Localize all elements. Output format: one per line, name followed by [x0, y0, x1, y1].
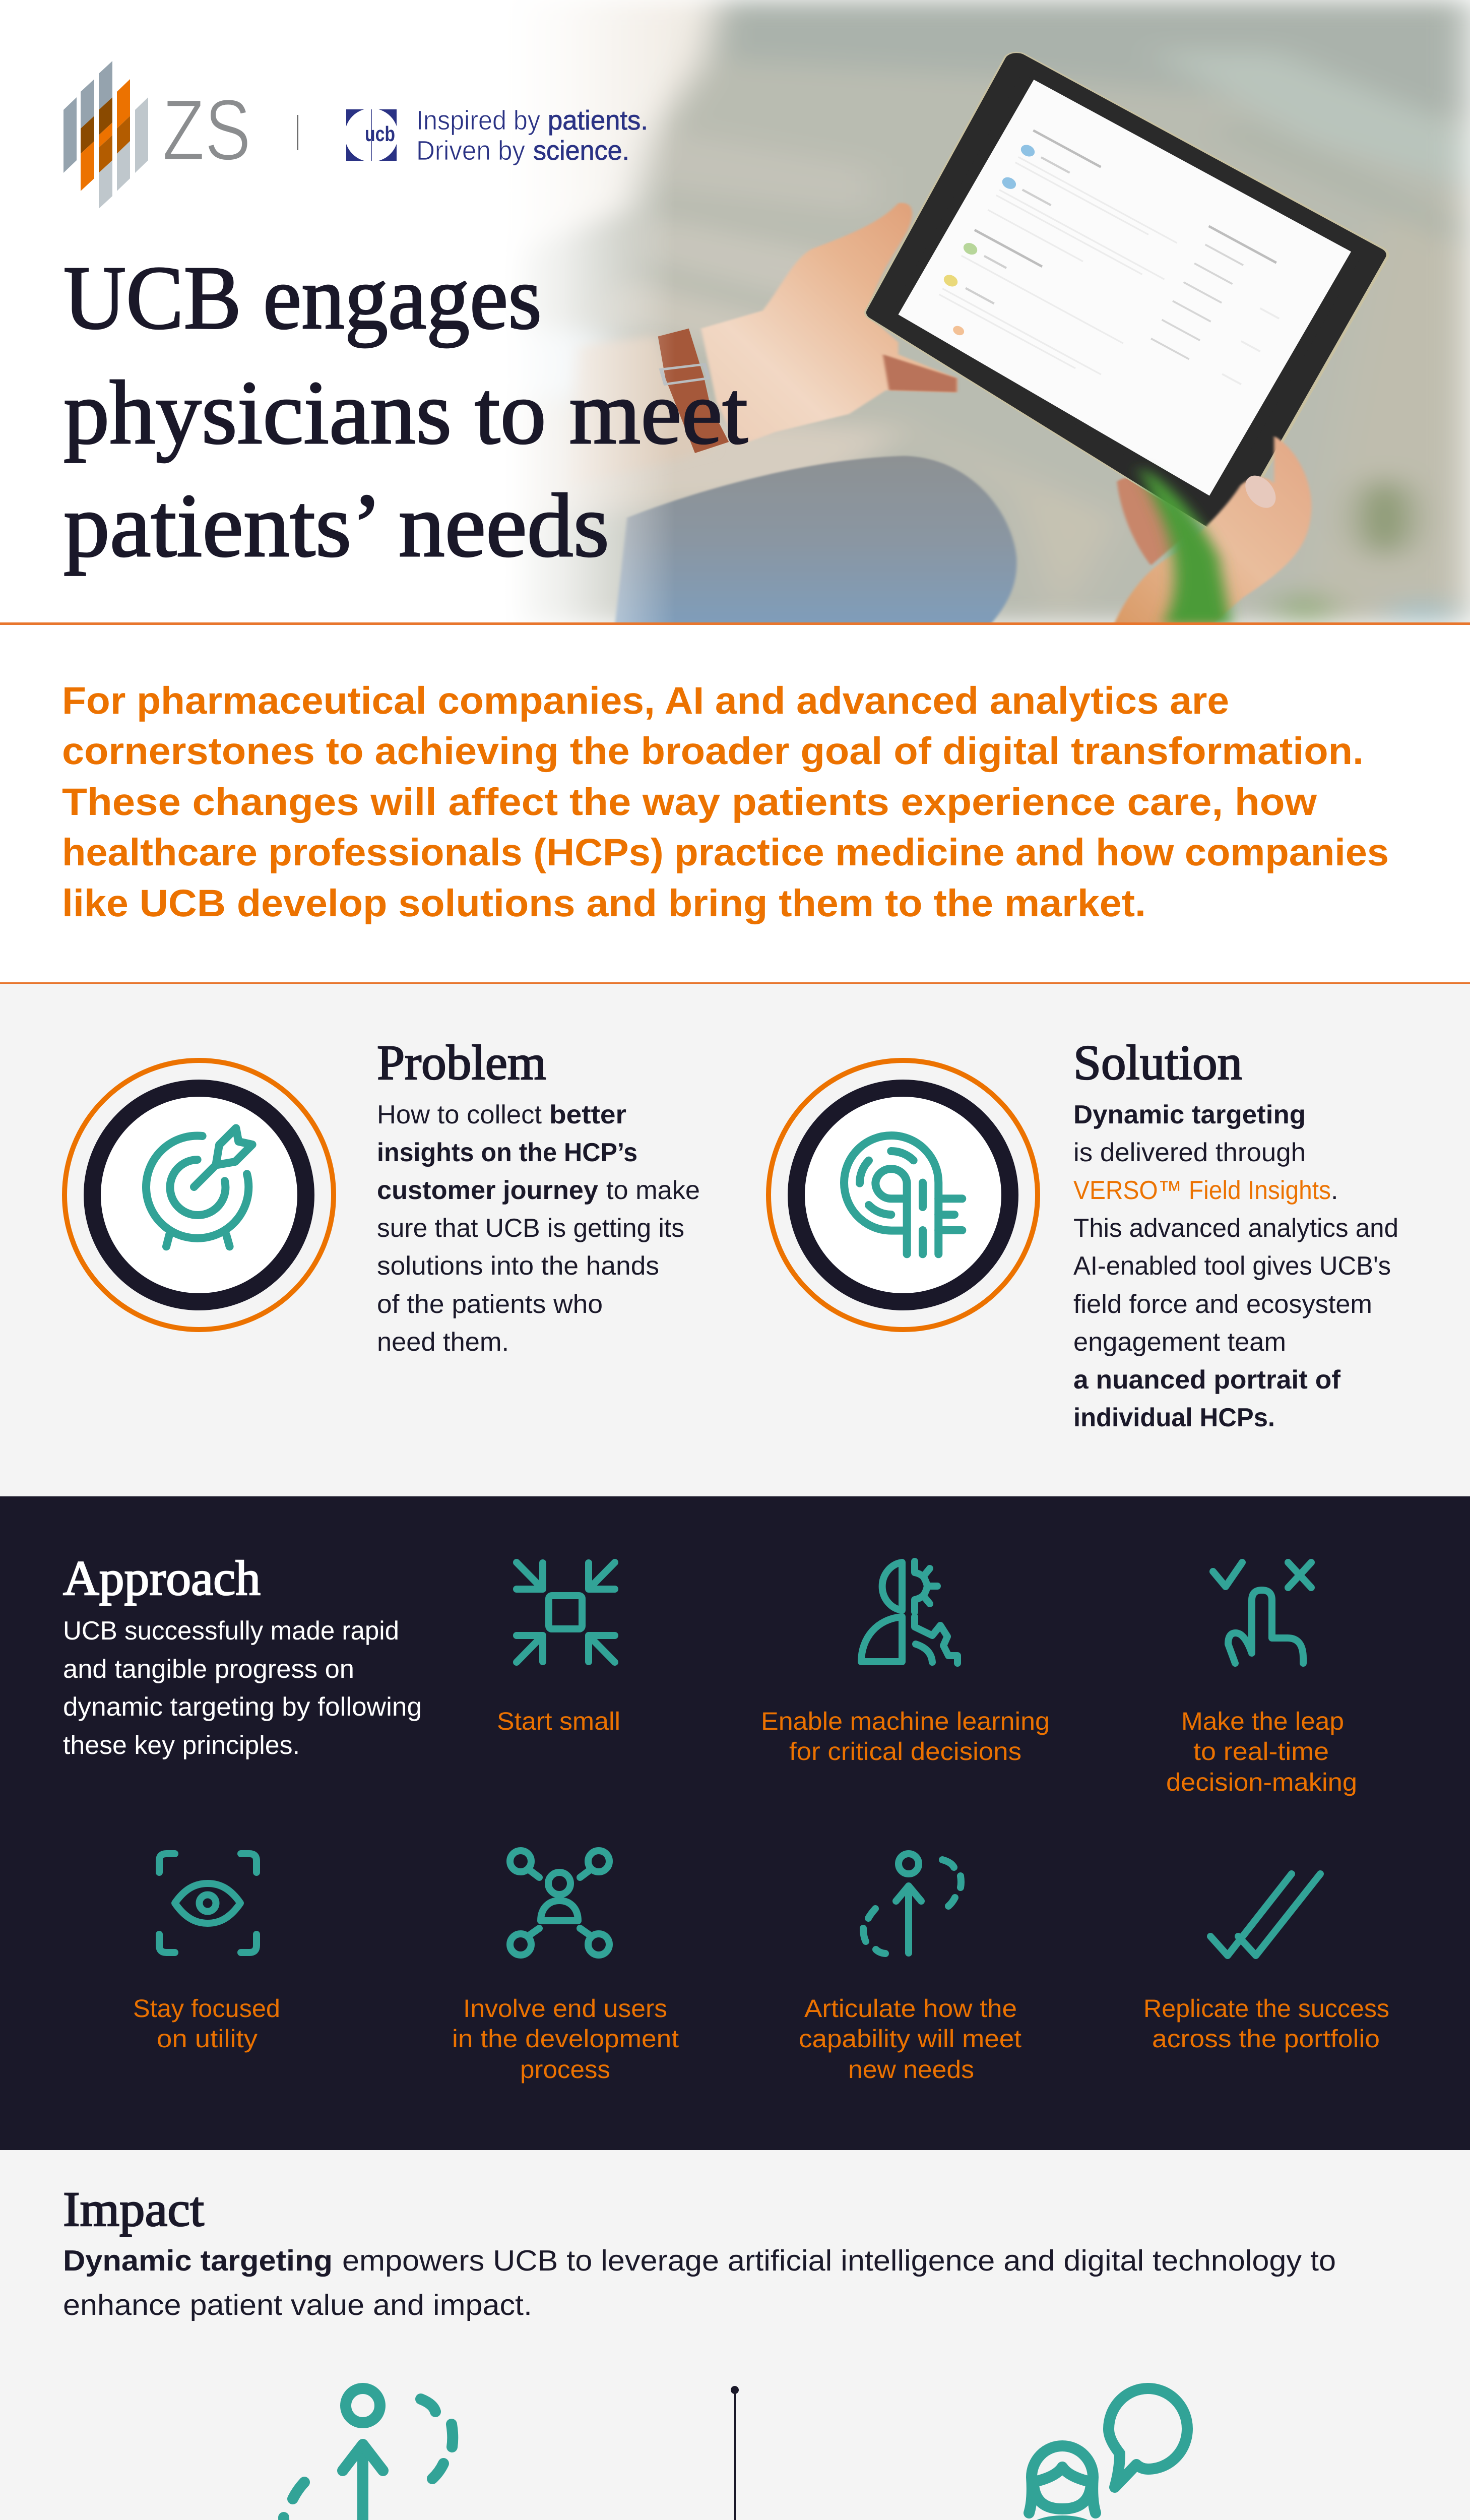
logo: UCB	[345, 105, 648, 166]
icon: capability arrow	[863, 1854, 961, 1954]
icon: utility eye	[159, 1854, 257, 1952]
hero fade to white	[504, 0, 675, 622]
solution text: a nuanced portrait of	[1073, 1365, 1341, 1395]
label: end users: process	[520, 2055, 610, 2084]
label: capability: capability will meet	[799, 2025, 1021, 2053]
problem text: solutions into the hands	[377, 1251, 659, 1281]
forearm	[577, 335, 684, 427]
icon: double check	[1210, 1874, 1320, 1956]
title	[63, 247, 748, 576]
icon: field employee speaking	[1017, 2388, 1187, 2520]
icon: end users network	[510, 1851, 609, 1955]
intro text: like UCB develop solutions and bring them to the market.	[62, 882, 1146, 925]
panel: hero	[0, 0, 1470, 625]
panel: problem	[65, 1036, 700, 1357]
label: capability: new needs	[848, 2055, 974, 2084]
problem text: How to collect	[377, 1100, 542, 1129]
heading: problem: Problem	[377, 1036, 546, 1090]
label: end users: Involve end users	[463, 1994, 667, 2023]
logo: UCB: Inspired by	[416, 105, 540, 136]
jeans knee	[615, 456, 1017, 624]
problem text: insights on the HCP’s	[377, 1138, 637, 1167]
label: machine learning: for critical decisions	[789, 1737, 1021, 1766]
logo: UCB: Driven by	[416, 136, 525, 166]
approach text: UCB successfully made rapid	[63, 1616, 399, 1646]
heading: solution: Solution	[1073, 1036, 1242, 1090]
hero photo: hands holding a tablet	[0, 0, 1470, 625]
label: utility: on utility	[157, 2025, 258, 2053]
problem text: sure that UCB is getting its	[377, 1214, 684, 1243]
icon: machine learning	[861, 1561, 957, 1663]
problem text: need them.	[377, 1328, 509, 1357]
left hand	[701, 203, 957, 446]
problem text: to make	[606, 1176, 700, 1205]
heading: approach: Approach	[63, 1551, 261, 1606]
label: end users: in the development	[452, 2025, 679, 2053]
label: capability	[799, 1994, 1021, 2084]
intro text: cornerstones to achieving the broader goal of digital transformation.	[62, 730, 1364, 773]
title: UCB engages	[63, 247, 542, 348]
lower hand fingers behind tablet	[1116, 477, 1178, 565]
heading: impact: Impact	[63, 2182, 204, 2237]
icon: numbers arrow	[284, 2388, 453, 2520]
solution text: field force and ecosystem	[1073, 1290, 1372, 1319]
foreground leaf	[1138, 466, 1231, 624]
icon: fingerprint AI	[769, 1060, 1038, 1330]
intro text: These changes will affect the way patients experience care, how	[62, 781, 1317, 824]
approach text: these key principles.	[63, 1731, 300, 1760]
intro text: For pharmaceutical companies, AI and advanced analytics are	[62, 679, 1229, 722]
label: machine learning	[761, 1707, 1050, 1766]
panel: intro	[0, 625, 1470, 983]
impact intro	[63, 2244, 1336, 2321]
icon: real-time decision	[1213, 1562, 1311, 1663]
approach text	[63, 1616, 422, 1760]
logo: ZS: ZS	[162, 82, 251, 178]
title: physicians to meet	[63, 362, 748, 463]
label: machine learning: Enable machine learning	[761, 1707, 1050, 1735]
intro text	[62, 679, 1389, 925]
tablet body	[878, 60, 1375, 525]
divider: vertical line	[731, 2386, 739, 2520]
panel: impact	[63, 2182, 1336, 2520]
solution text	[1073, 1100, 1398, 1432]
icon: start small	[517, 1562, 615, 1662]
label: replicate	[1143, 1994, 1389, 2053]
solution text: is delivered through	[1073, 1138, 1306, 1167]
label: utility: Stay focused	[133, 1994, 280, 2023]
label: start small: Start small	[497, 1707, 620, 1735]
logo: UCB: science.	[533, 136, 629, 166]
title: patients’ needs	[63, 475, 609, 576]
label: replicate: Replicate the success	[1143, 1994, 1389, 2023]
panel: approach	[0, 1496, 1470, 2150]
label: real-time decision: Make the leap	[1181, 1707, 1344, 1735]
tablet screen	[898, 80, 1351, 496]
solution text: AI-enabled tool gives UCB's	[1073, 1251, 1391, 1281]
tablet edge	[878, 60, 1376, 526]
impact intro: enhance patient value and impact.	[63, 2289, 532, 2321]
impact intro: empowers UCB to leverage artificial intelligence and digital technology to	[342, 2244, 1336, 2277]
solution text: This advanced analytics and	[1073, 1214, 1398, 1243]
label: real-time decision: decision-making	[1166, 1768, 1357, 1796]
logo: UCB: ucb	[365, 122, 395, 146]
solution text: engagement team	[1073, 1328, 1286, 1357]
solution text: Dynamic targeting	[1073, 1100, 1306, 1129]
logo: UCB: patients.	[548, 105, 648, 136]
solution text: .	[1331, 1176, 1338, 1205]
label: utility	[133, 1994, 280, 2053]
tablet screen content	[922, 128, 1304, 464]
problem text	[377, 1100, 700, 1357]
logo: ZS	[63, 61, 251, 209]
intro text: healthcare professionals (HCPs) practice medicine and how companies	[62, 831, 1389, 874]
label: replicate: across the portfolio	[1152, 2025, 1380, 2053]
impact intro: Dynamic targeting	[63, 2244, 333, 2277]
problem text: better	[549, 1100, 626, 1129]
solution text: individual HCPs.	[1073, 1403, 1275, 1432]
icon: target	[65, 1060, 334, 1330]
label: real-time decision	[1166, 1707, 1357, 1796]
watch strap	[658, 329, 729, 453]
panel: solution	[769, 1036, 1398, 1432]
approach text: and tangible progress on	[63, 1655, 354, 1684]
label: real-time decision: to real-time	[1193, 1737, 1329, 1766]
approach text: dynamic targeting by following	[63, 1692, 422, 1722]
problem text: customer journey	[377, 1176, 598, 1205]
right hand	[1114, 436, 1311, 624]
label: end users	[452, 1994, 679, 2084]
label: capability: Articulate how the	[804, 1994, 1017, 2023]
problem text: of the patients who	[377, 1290, 603, 1319]
solution text: VERSO™ Field Insights	[1073, 1176, 1331, 1205]
thumb shading	[883, 354, 957, 392]
